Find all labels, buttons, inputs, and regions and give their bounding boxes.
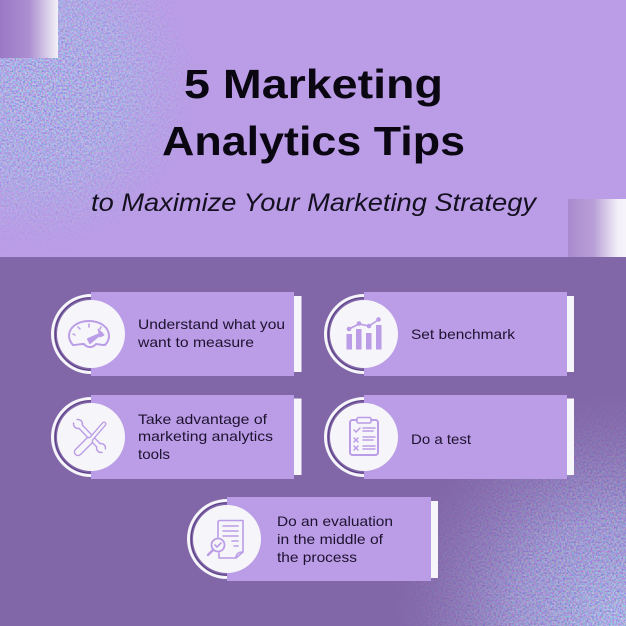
text: tip 1 (137, 316, 285, 350)
icon: bar chart with trend line (346, 317, 382, 350)
text: tip 3: tools (138, 446, 170, 462)
icon: clipboard checklist (350, 418, 378, 455)
text: tip 1: want to measure (137, 334, 254, 350)
panel: tip 2 set benchmark (325, 292, 574, 376)
title (162, 61, 465, 164)
icon: speedometer (69, 321, 109, 347)
panel: tip 4 do a test (325, 395, 574, 479)
panel: tip 1 understand what you want to measure (52, 292, 301, 376)
decorative gradient square: right (568, 199, 626, 257)
panel: tip 3 analytics tools (52, 395, 301, 479)
title: 5 Marketing (184, 61, 443, 107)
text: tip 5: in the middle of (277, 531, 383, 547)
title: Analytics Tips (162, 118, 465, 164)
text: tip 3: marketing analytics (138, 428, 273, 444)
text: tip 5 (277, 513, 393, 565)
text: tip 5: Do an evaluation (277, 513, 393, 529)
text: tip 4: Do a test (411, 431, 471, 447)
icon: document with magnifier (208, 520, 243, 558)
text: tip 1: Understand what you (138, 316, 285, 332)
text: tip 2: Set benchmark (411, 326, 516, 342)
subtitle: to Maximize Your Marketing Strategy (91, 189, 538, 217)
text: tip 3 (138, 411, 273, 462)
background: top lilac band (0, 0, 188, 239)
background: lower purple band (0, 257, 626, 626)
decorative gradient square: top left (0, 0, 58, 58)
text: tip 5: the process (277, 549, 357, 565)
panel: tip 5 do an evaluation (188, 497, 438, 581)
text: tip 3: Take advantage of (138, 411, 267, 427)
icon: crossed wrench and screwdriver (72, 418, 107, 454)
